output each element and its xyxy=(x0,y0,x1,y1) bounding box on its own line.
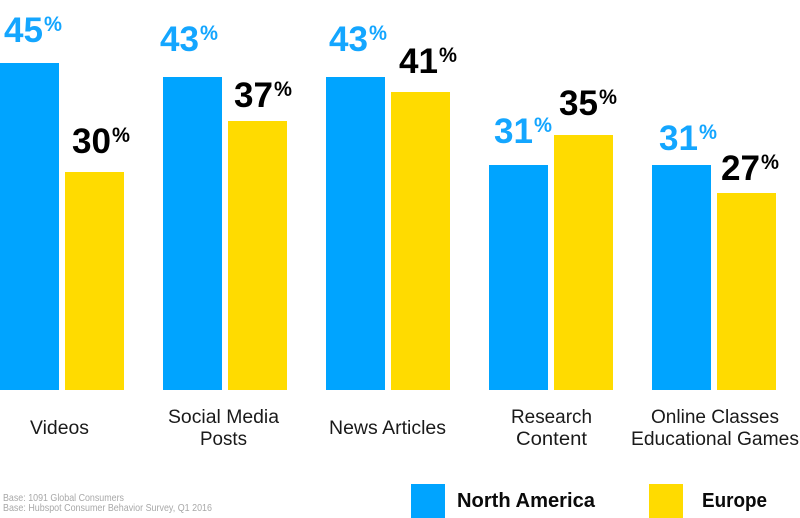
bar group: News Articles: % xyxy=(439,44,457,67)
bar group: Online Classes Educational Games: Online Classes xyxy=(651,407,779,428)
bar group: Online Classes Educational Games: 31 xyxy=(659,119,698,158)
bar group: Videos: 45 xyxy=(4,11,43,50)
bar group: Research Content: % xyxy=(534,114,552,137)
bar group: Social Media Posts: Social Media xyxy=(168,407,279,428)
bar group: Social Media Posts: % xyxy=(274,78,292,101)
bar group: Videos: Videos xyxy=(30,418,89,439)
legend: Europe xyxy=(649,484,767,518)
bar group: Research Content: 35 xyxy=(559,84,598,123)
bar group: Online Classes Educational Games xyxy=(631,119,799,450)
bar group: Social Media Posts: % xyxy=(200,22,218,45)
bar group: News Articles: 43 xyxy=(329,20,368,59)
bar group: Online Classes Educational Games: % xyxy=(761,151,779,174)
legend: Europe: Europe xyxy=(702,490,767,512)
bar group: News Articles: News Articles xyxy=(329,418,446,439)
source note xyxy=(3,492,212,514)
bar group: Research Content: 31 xyxy=(494,112,533,151)
bar group: Research Content: Content xyxy=(516,429,588,450)
bar group: Videos: 30 xyxy=(72,122,111,161)
bar group: Social Media Posts: 37 xyxy=(234,76,273,115)
bar group: Online Classes Educational Games: Educational Games xyxy=(631,429,799,450)
bar group: Online Classes Educational Games: 27 xyxy=(721,149,760,188)
bar group: News Articles: % xyxy=(369,22,387,45)
bar group: News Articles: 41 xyxy=(399,42,438,81)
bar group: Videos xyxy=(0,11,130,439)
bar group: Research Content: Research xyxy=(511,407,592,428)
bar group: Social Media Posts xyxy=(160,20,292,450)
legend: North America xyxy=(411,484,596,518)
bar group: News Articles xyxy=(326,20,457,439)
source note: Base: Hubspot Consumer Behavior Survey, Q1 2016 xyxy=(3,502,212,514)
bar group: Research Content: % xyxy=(599,86,617,109)
bar group: Social Media Posts: Posts xyxy=(200,429,247,450)
bar group: Social Media Posts: 43 xyxy=(160,20,199,59)
bar group: Online Classes Educational Games: % xyxy=(699,121,717,144)
source note: Base: 1091 Global Consumers xyxy=(3,492,124,504)
bar group: Research Content xyxy=(489,84,617,450)
bar group: Videos: % xyxy=(44,13,62,36)
bar group: Videos: % xyxy=(112,124,130,147)
legend: North America: North America xyxy=(457,490,596,512)
